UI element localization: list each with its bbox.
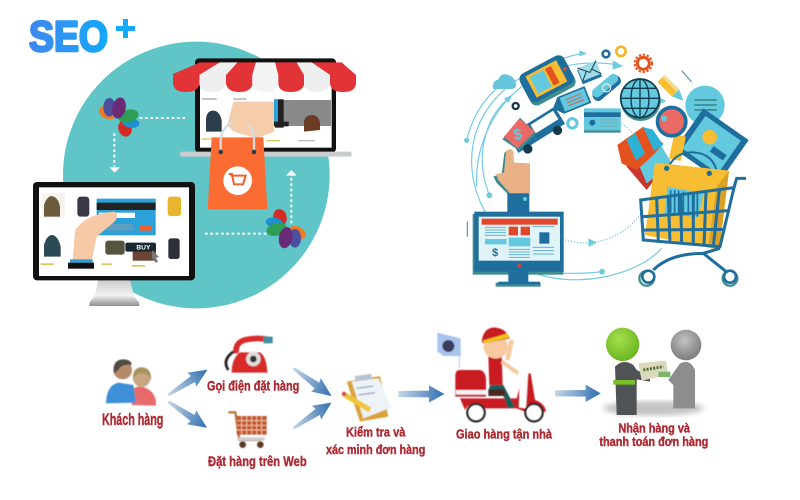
dotted arrows	[109, 118, 297, 234]
arrow: customer to web	[164, 395, 212, 435]
icon: dollar tag: $	[512, 126, 523, 144]
icon: pointing hand	[493, 149, 530, 213]
label: check order: xác minh đơn hàng	[326, 442, 425, 457]
label: check order: Kiểm tra và	[346, 425, 406, 440]
icon: price tag	[550, 86, 591, 117]
icon: gear navy	[603, 51, 609, 57]
connecting arcs	[465, 51, 692, 280]
icon: shopping cart	[228, 412, 267, 448]
label: web order: Đặt hàng trên Web	[208, 453, 307, 469]
icon: delivery scooter	[455, 327, 546, 421]
illustration: e-commerce icons and cart	[465, 47, 749, 287]
icon: delivery truck	[508, 107, 568, 158]
icon: gear yellow	[616, 47, 626, 56]
label: check order	[326, 425, 425, 457]
orange shopping bag	[208, 122, 267, 209]
process flow: left half	[102, 337, 444, 469]
process flow: right half	[437, 327, 708, 449]
arrow: delivery to payment	[555, 385, 601, 402]
icon: flag	[437, 333, 461, 368]
label: receive and pay	[599, 422, 708, 449]
label: customers: Khách hàng	[102, 410, 163, 429]
icon: pencil	[658, 75, 687, 104]
icon: globe	[621, 79, 661, 121]
desktop screen icon: $	[492, 247, 499, 259]
icon: credit card	[584, 108, 621, 133]
icon: gear dark	[513, 103, 519, 109]
label: home delivery: Giao hàng tận nhà	[456, 426, 552, 441]
icon: smartphone	[517, 53, 578, 108]
icon: cloud	[493, 74, 516, 89]
arrow: check to delivery	[398, 385, 444, 403]
desktop monitor	[33, 182, 195, 306]
arrow: web to check	[289, 396, 336, 435]
flower logo bottom	[265, 208, 308, 249]
label: phone order: Gọi điện đặt hàng	[207, 378, 299, 394]
label: receive and pay: thanh toán đơn hàng	[599, 435, 708, 449]
icon: storefront	[617, 127, 672, 190]
illustration: handover	[603, 328, 703, 416]
icon: clipboard	[342, 374, 392, 422]
icon: customers	[106, 359, 156, 406]
flower logo top	[97, 96, 140, 138]
teal background circle	[63, 42, 330, 308]
icon: speech bubble	[685, 86, 725, 133]
icon: gear light blue	[568, 119, 577, 128]
awning	[173, 62, 356, 92]
icon: dollar tag	[502, 118, 536, 151]
illustration: online store cycle	[33, 42, 356, 308]
icon: gear orange	[635, 55, 652, 72]
icon: envelope	[577, 61, 602, 84]
icon: shopping cart with bag	[639, 152, 746, 286]
icon: tablet	[675, 108, 749, 181]
label: receive and pay: Nhận hàng và	[618, 422, 691, 436]
arrow: phone to check	[288, 362, 337, 403]
desktop monitor: BUY	[136, 245, 151, 252]
desktop screen icon	[473, 212, 564, 287]
icon: magnifier	[656, 106, 688, 161]
arrow: customer to phone	[164, 363, 212, 402]
logo: SEO+: SEO	[29, 13, 108, 61]
icon: red telephone	[226, 337, 273, 373]
laptop storefront	[180, 58, 352, 157]
icon: headset	[589, 72, 623, 103]
